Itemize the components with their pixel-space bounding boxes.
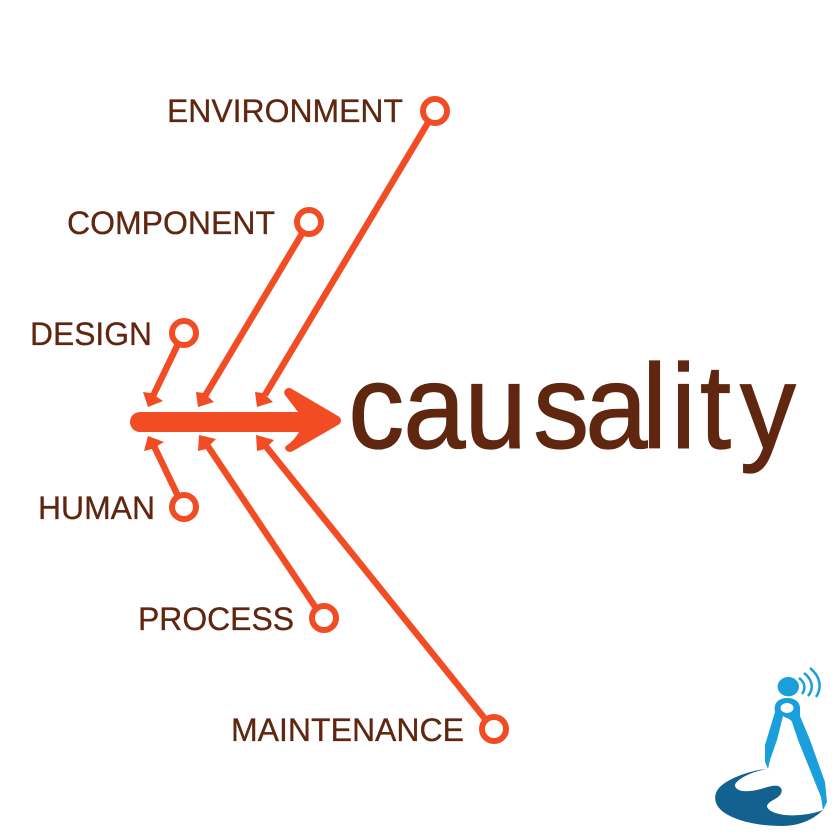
logo compass legs bbox=[765, 698, 827, 810]
logo compass hinge bbox=[780, 703, 794, 713]
cause: maintenance bbox=[231, 435, 506, 748]
cause: human: HUMAN bbox=[38, 490, 155, 526]
logo signal waves bbox=[799, 668, 820, 697]
main arrow bbox=[130, 388, 341, 452]
cause: maintenance: MAINTENANCE bbox=[231, 712, 464, 748]
cause: design bbox=[30, 316, 196, 407]
cause: process: PROCESS bbox=[138, 601, 294, 637]
cause: process bbox=[138, 435, 336, 637]
cause: environment: ENVIRONMENT bbox=[167, 93, 403, 129]
logo swoosh bbox=[715, 769, 823, 826]
icon: compass logo bbox=[715, 668, 827, 826]
cause: component: COMPONENT bbox=[67, 205, 275, 241]
title: causality: causality bbox=[348, 339, 796, 474]
cause: human bbox=[38, 436, 196, 526]
cause: environment bbox=[167, 93, 447, 407]
cause: component bbox=[67, 205, 321, 407]
cause: design: DESIGN bbox=[30, 316, 152, 352]
logo head bbox=[778, 677, 799, 696]
